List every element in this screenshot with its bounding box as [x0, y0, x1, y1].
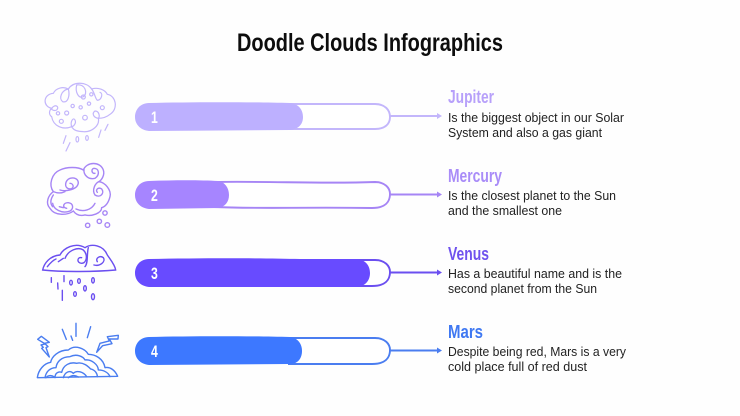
progress bar 1: 1	[151, 109, 158, 128]
icon: swirly cloud	[48, 163, 110, 227]
text: Venus	[448, 244, 622, 296]
arrow 1	[390, 113, 442, 119]
text: Mercury	[448, 166, 616, 218]
progress bar 2	[135, 180, 390, 209]
text: Mars: Despite being red, Mars is a very	[448, 345, 627, 359]
icon: rain cloud with dots	[45, 83, 115, 151]
progress bar 4	[135, 336, 390, 365]
text: Jupiter: System and also a gas giant	[448, 126, 603, 140]
row: Mars	[37, 322, 627, 378]
text: Jupiter: Jupiter	[448, 87, 494, 107]
text: Mars	[448, 322, 627, 374]
text: Mars: cold place full of red dust	[448, 360, 588, 374]
row: Mercury	[48, 163, 616, 227]
text: Mercury: and the smallest one	[448, 204, 562, 218]
progress bar 3	[135, 258, 390, 287]
text: Mars: Mars	[448, 322, 483, 342]
progress bar 3: 3	[151, 265, 158, 284]
row: Jupiter	[45, 83, 624, 151]
text: Jupiter	[448, 87, 624, 140]
text: Venus: Venus	[448, 244, 489, 264]
title: Doodle Clouds Infographics	[237, 29, 503, 57]
arrow 2	[390, 192, 442, 198]
icon: rain cloud	[43, 245, 116, 300]
progress bar 1	[135, 102, 390, 131]
arrow 3	[390, 270, 442, 276]
text: Venus: Has a beautiful name and is the	[448, 267, 622, 281]
row: Venus	[43, 244, 622, 300]
icon: storm cloud with lightning	[37, 323, 118, 378]
arrow 4	[390, 348, 442, 354]
text: Mercury: Mercury	[448, 166, 502, 186]
progress bar 2: 2	[151, 187, 158, 206]
progress bar 4: 4	[151, 343, 158, 362]
text: Venus: second planet from the Sun	[448, 282, 597, 296]
text: Jupiter: Is the biggest object in our Solar	[448, 111, 624, 125]
text: Mercury: Is the closest planet to the Sun	[448, 189, 616, 203]
